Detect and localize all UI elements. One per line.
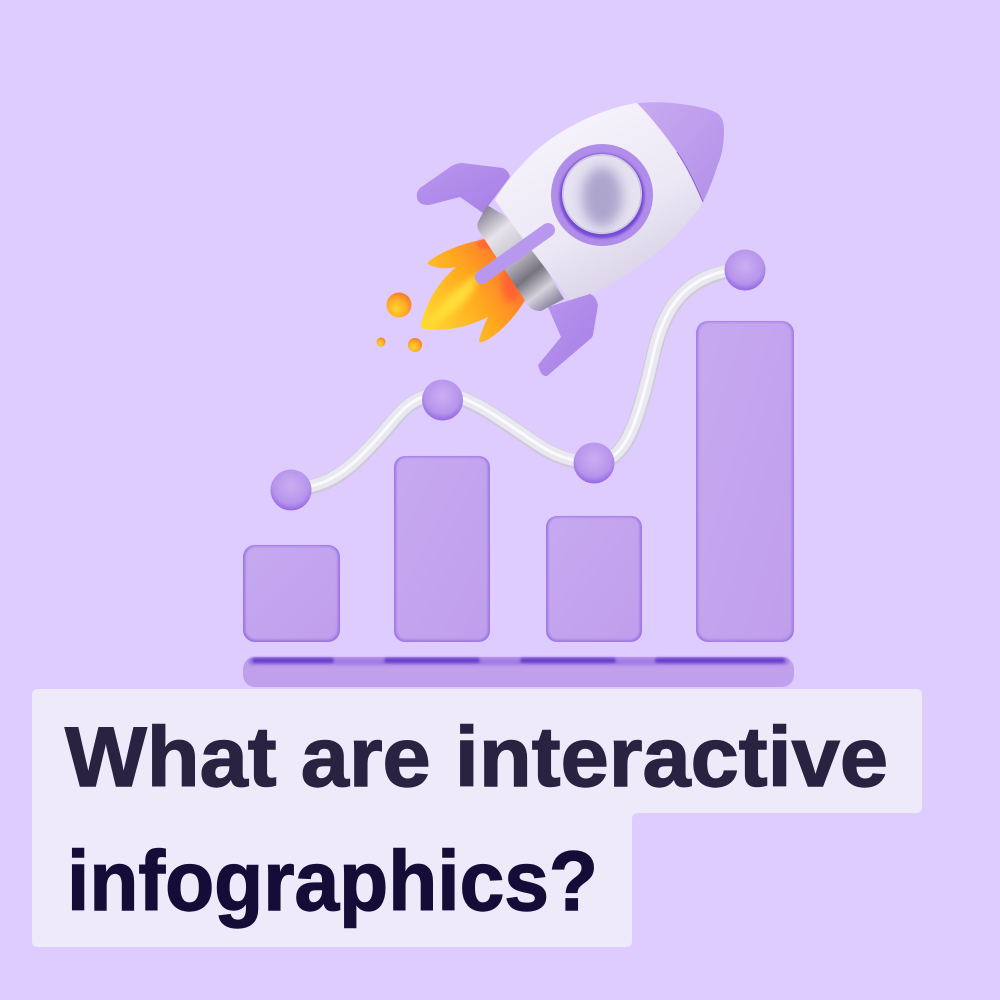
trend node 4 [724, 250, 766, 290]
chart base platform [243, 657, 794, 687]
lower fin [538, 294, 598, 376]
bar 2 [394, 456, 490, 642]
icon: rocket [376, 102, 724, 376]
engine ring [477, 205, 564, 311]
trend node 2 [422, 380, 463, 420]
bar 3 [546, 516, 642, 642]
title line 2: infographics? [67, 834, 598, 928]
trend line [306, 270, 730, 488]
sparks [376, 292, 422, 352]
bar 4 [696, 321, 794, 642]
trend node 1 [270, 470, 312, 510]
panel background [32, 689, 922, 947]
title line 1: What are interactive [65, 710, 888, 804]
nose seam [677, 152, 703, 202]
upper fin [417, 163, 510, 213]
center fin [482, 230, 548, 277]
window [551, 144, 653, 246]
bar 1 [243, 545, 340, 642]
chart: bars with trend line [243, 250, 794, 687]
rocket nose [637, 102, 724, 202]
trend node 3 [574, 442, 614, 484]
rocket body [495, 103, 705, 300]
flame [421, 239, 527, 342]
title panel [32, 689, 922, 947]
